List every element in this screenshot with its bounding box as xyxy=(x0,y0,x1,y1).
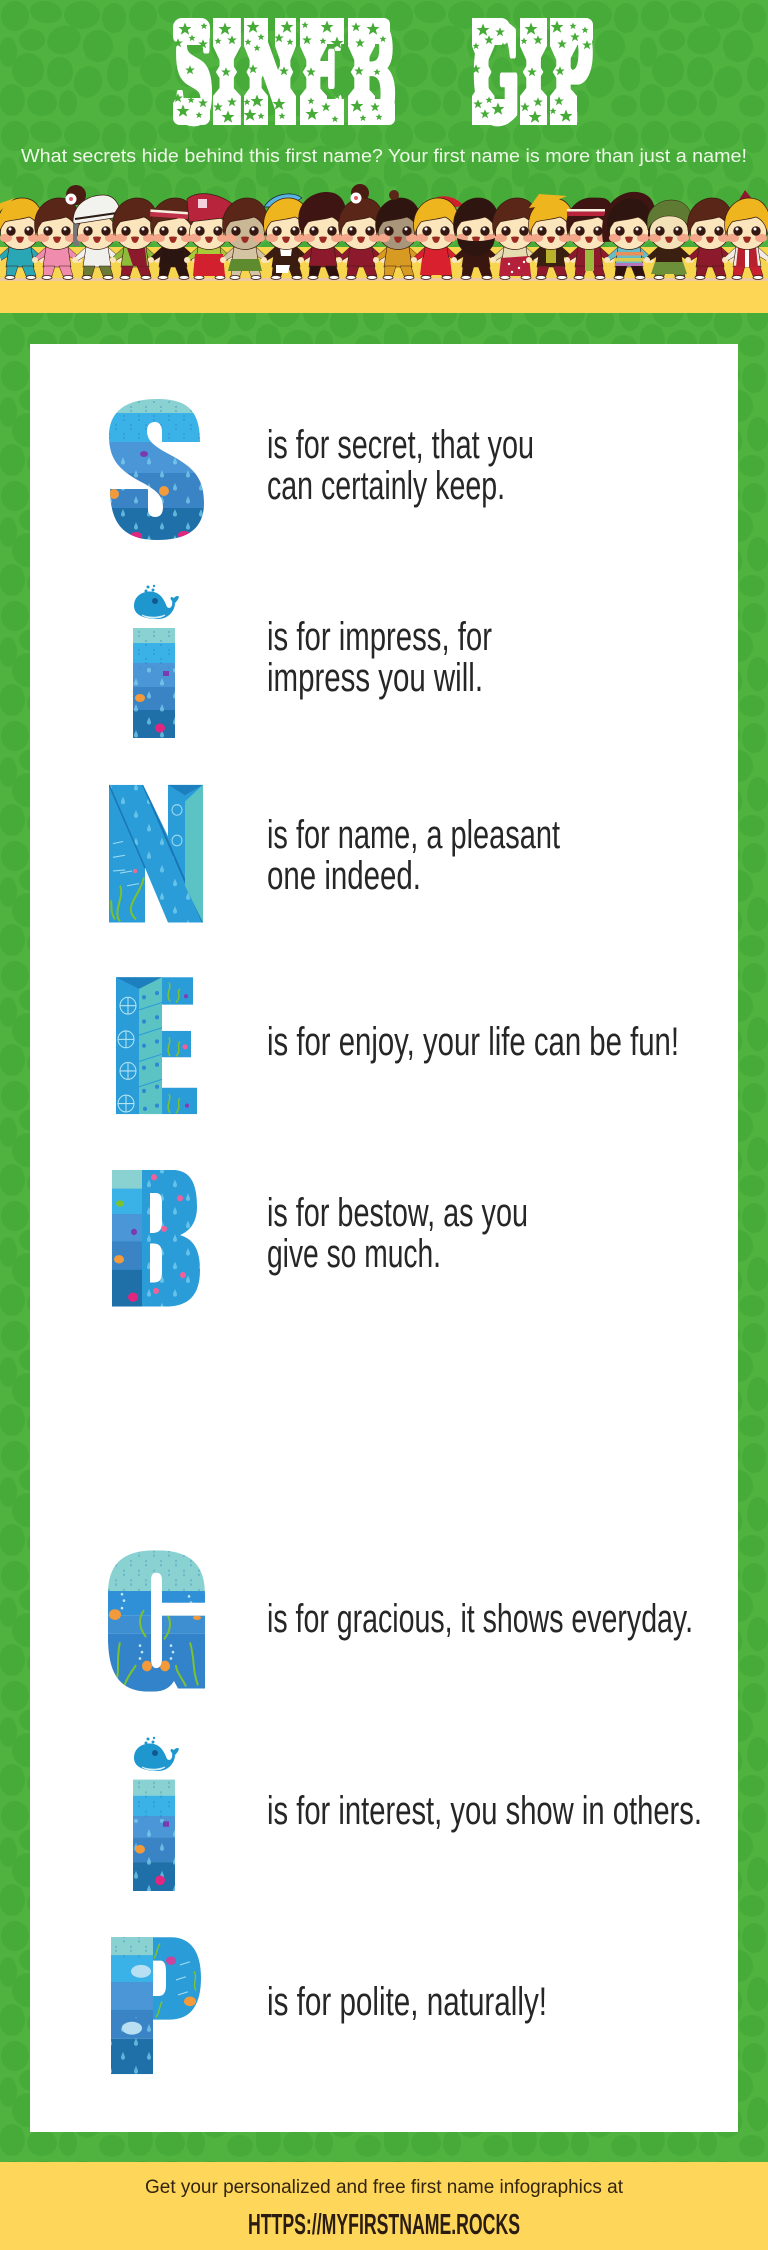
text: N line: one indeed. xyxy=(267,854,421,898)
character parade xyxy=(0,184,768,280)
character: blond girl in red and white xyxy=(722,190,768,280)
letter B xyxy=(112,1170,203,1307)
text: B line: is for bestow, as you xyxy=(267,1191,528,1235)
character: blond boy in olive xyxy=(526,194,576,280)
character: blond girl in red dress xyxy=(411,196,464,280)
character: bearded man in brown xyxy=(451,198,501,280)
character: girl in maroon with flower xyxy=(336,184,386,280)
character: man in white headdress xyxy=(72,195,123,280)
letter B row xyxy=(112,1170,528,1307)
letter I xyxy=(133,1780,175,1891)
letter P row xyxy=(111,1937,547,2074)
letter N xyxy=(109,785,203,923)
text: I line: impress you will. xyxy=(267,656,483,700)
whale icon xyxy=(134,1737,179,1771)
text: N line xyxy=(267,813,560,898)
character: figure in striped top xyxy=(602,192,655,280)
letter E row xyxy=(116,977,679,1114)
footer url: HTTPS://MYFIRSTNAME.ROCKS xyxy=(248,2209,520,2241)
text: N line: is for name, a pleasant xyxy=(267,813,560,857)
letter E xyxy=(116,977,197,1114)
character: girl in red skirt and pink hat xyxy=(184,194,235,280)
letter N row xyxy=(109,785,560,923)
text: B line: give so much. xyxy=(267,1232,441,1276)
second letter I row xyxy=(133,1737,702,1891)
letter G xyxy=(105,1550,208,1692)
character: laughing figure with leaf crown xyxy=(644,200,694,280)
text: I line xyxy=(267,615,492,700)
character: boy in black with patterned band xyxy=(148,198,198,280)
character: figure in maroon robe with green strip xyxy=(564,198,614,280)
character: girl in pink with flower xyxy=(32,185,86,280)
letter S row xyxy=(105,399,534,540)
panel: white letters card xyxy=(30,344,738,2132)
yellow band under characters xyxy=(0,247,768,313)
text: I line: is for impress, for xyxy=(267,615,492,659)
character: girl in dotted skirt xyxy=(490,198,540,280)
text: P line: is for polite, naturally! xyxy=(267,1980,547,2024)
text: B line xyxy=(267,1191,528,1276)
text: S line: is for secret, that you xyxy=(267,423,534,467)
character: blond boy with blue cap xyxy=(261,194,311,280)
footer xyxy=(0,2162,768,2250)
letter I row xyxy=(133,585,492,738)
character: blond boy in overalls xyxy=(0,198,45,280)
character: tall dark-haired figure in maroon xyxy=(298,192,348,280)
character: boy in maroon robe xyxy=(685,198,735,280)
text: S line xyxy=(267,423,534,508)
subtitle: What secrets hide behind this first name? Your first name is more than just a name! xyxy=(21,145,747,166)
character: boy in green and maroon xyxy=(110,198,160,280)
text: S line: can certainly keep. xyxy=(267,464,505,508)
letter S xyxy=(105,399,208,540)
title: GIP xyxy=(473,0,593,152)
whale icon xyxy=(134,585,179,619)
letter P xyxy=(111,1937,203,2074)
letter G row xyxy=(105,1550,693,1692)
footer tagline: Get your personalized and free first name infographics at xyxy=(145,2177,624,2198)
title xyxy=(173,0,593,152)
character: boy in grass skirt xyxy=(220,198,270,280)
title: SINEB xyxy=(174,0,397,152)
letter I xyxy=(133,628,175,738)
character: dark-skinned figure in ochre xyxy=(373,190,423,280)
